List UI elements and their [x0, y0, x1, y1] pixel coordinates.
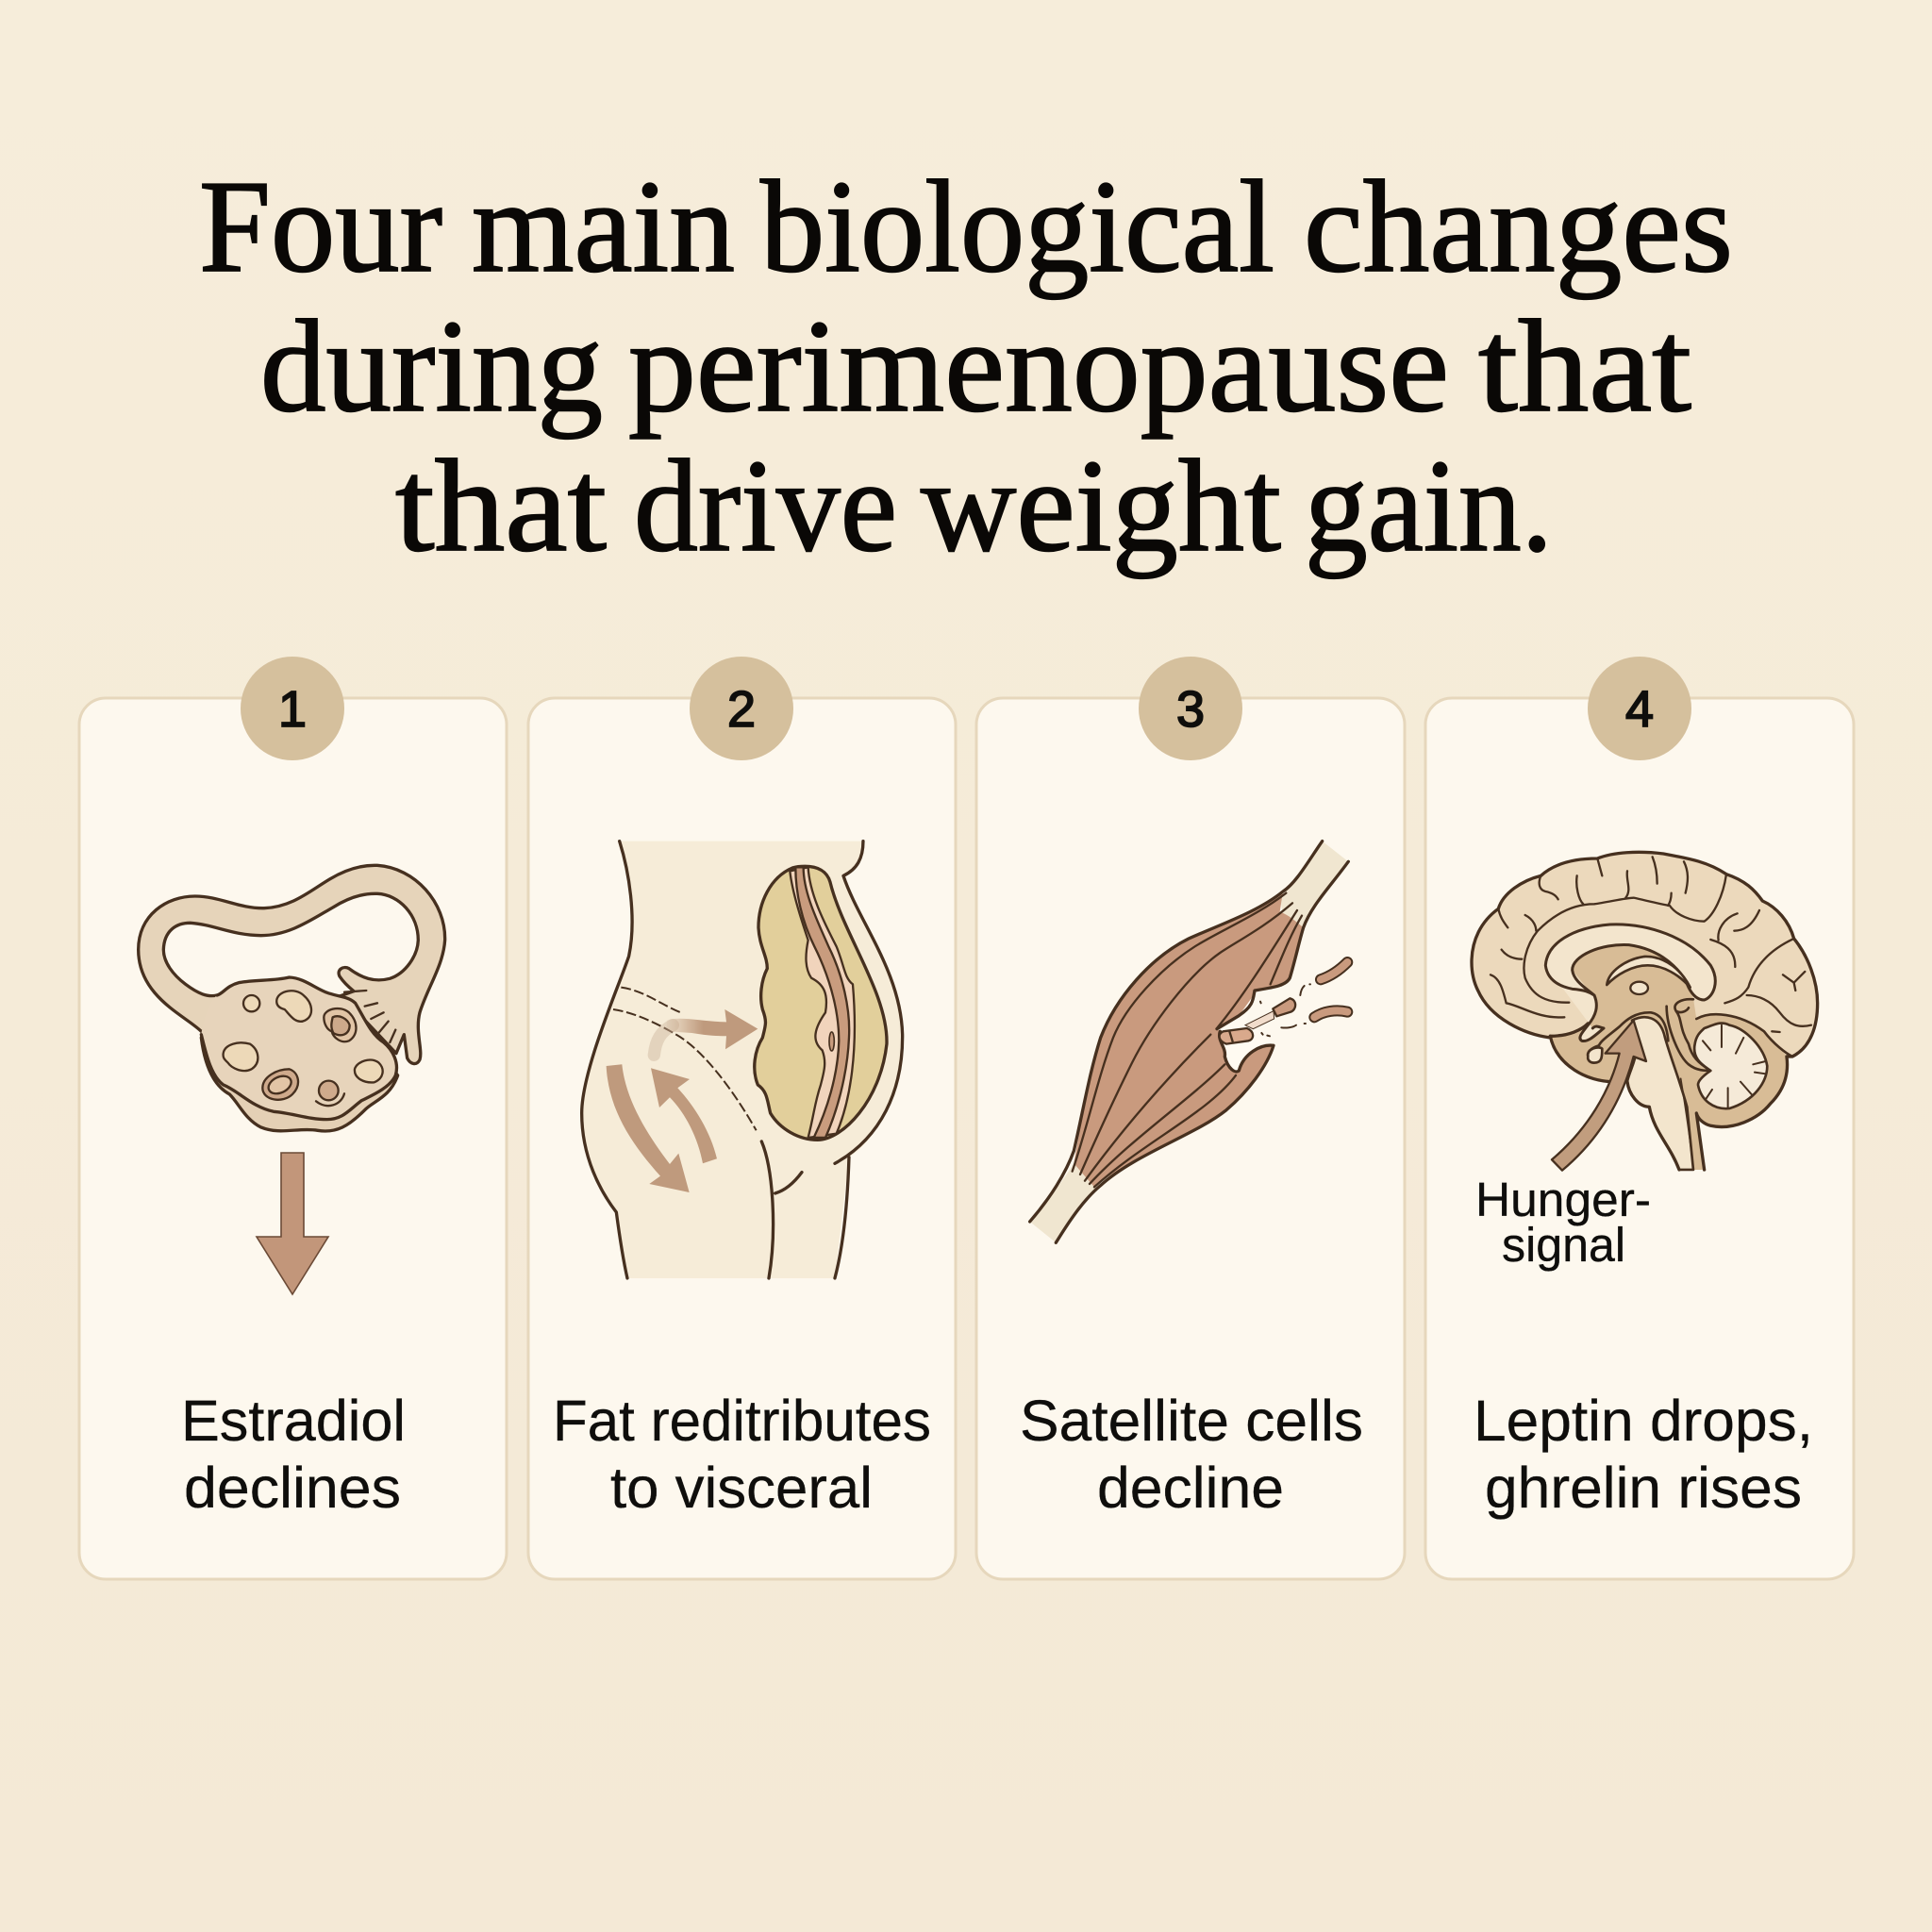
label: Satellite cells: [1020, 1389, 1363, 1453]
fimbriae: [344, 991, 395, 1042]
number badge 1: 1: [278, 681, 307, 738]
arrow: estradiol down: [257, 1153, 328, 1294]
title: changes: [1304, 154, 1733, 300]
label: [553, 1389, 931, 1520]
label: Fat reditributes: [553, 1389, 931, 1453]
brain outline: [1472, 852, 1818, 1170]
label: decline: [1097, 1456, 1284, 1520]
title: main: [472, 154, 735, 300]
title: biological: [760, 154, 1274, 300]
hunger signal label: Hunger-: [1475, 1173, 1651, 1226]
icon: brain cross-section: [1472, 852, 1818, 1171]
muscle fibres: [1073, 893, 1302, 1187]
title: Four: [199, 154, 442, 300]
icon: torn muscle: [1030, 841, 1348, 1242]
number badge 2: [690, 657, 793, 760]
muscle fragments: [1220, 962, 1347, 1044]
panel: satellite cells decline: [976, 657, 1405, 1579]
visceral fat: [755, 866, 887, 1140]
title: [199, 154, 1733, 579]
number badge 3: 3: [1176, 681, 1205, 738]
panel: leptin and ghrelin: [1425, 657, 1854, 1579]
dashed waist lines: [613, 988, 757, 1130]
label: to visceral: [610, 1456, 873, 1520]
icon: torso with visceral fat: [582, 841, 903, 1278]
label: [181, 1389, 406, 1520]
follicles: [224, 991, 383, 1106]
title: that: [1478, 293, 1691, 440]
panel: fat redistributes: [528, 657, 956, 1579]
number badge 4: [1588, 657, 1691, 760]
label: Estradiol: [181, 1389, 406, 1453]
title: weight: [921, 433, 1281, 579]
fat movement arrows: [607, 1064, 717, 1192]
hunger signal label: signal: [1502, 1218, 1625, 1272]
title: perimenopause: [628, 293, 1449, 440]
panel: estradiol declines: [79, 657, 507, 1579]
label: ghrelin rises: [1485, 1456, 1802, 1520]
number badge 1: [241, 657, 344, 760]
icon: ovary and fallopian tube: [139, 865, 445, 1131]
arrow to visceral fat: [654, 1009, 758, 1055]
number badge 2: 2: [727, 681, 756, 738]
tear gap: [1220, 993, 1274, 1072]
title: drive: [634, 433, 897, 579]
label: [1474, 1389, 1813, 1520]
title: gain.: [1305, 433, 1553, 579]
cortex folds: [1491, 857, 1811, 1032]
number badge 3: [1139, 657, 1242, 760]
number badge 4: 4: [1625, 681, 1654, 738]
hunger signal label: [1475, 1173, 1651, 1272]
deep brain structures: [1545, 924, 1792, 1170]
title: that: [395, 433, 607, 579]
title: during: [260, 293, 603, 440]
label: [1020, 1389, 1363, 1520]
cerebellum: [1694, 1024, 1767, 1108]
hunger signal arrow: [1552, 1021, 1646, 1171]
label: Leptin drops,: [1474, 1389, 1813, 1453]
label: declines: [184, 1456, 401, 1520]
